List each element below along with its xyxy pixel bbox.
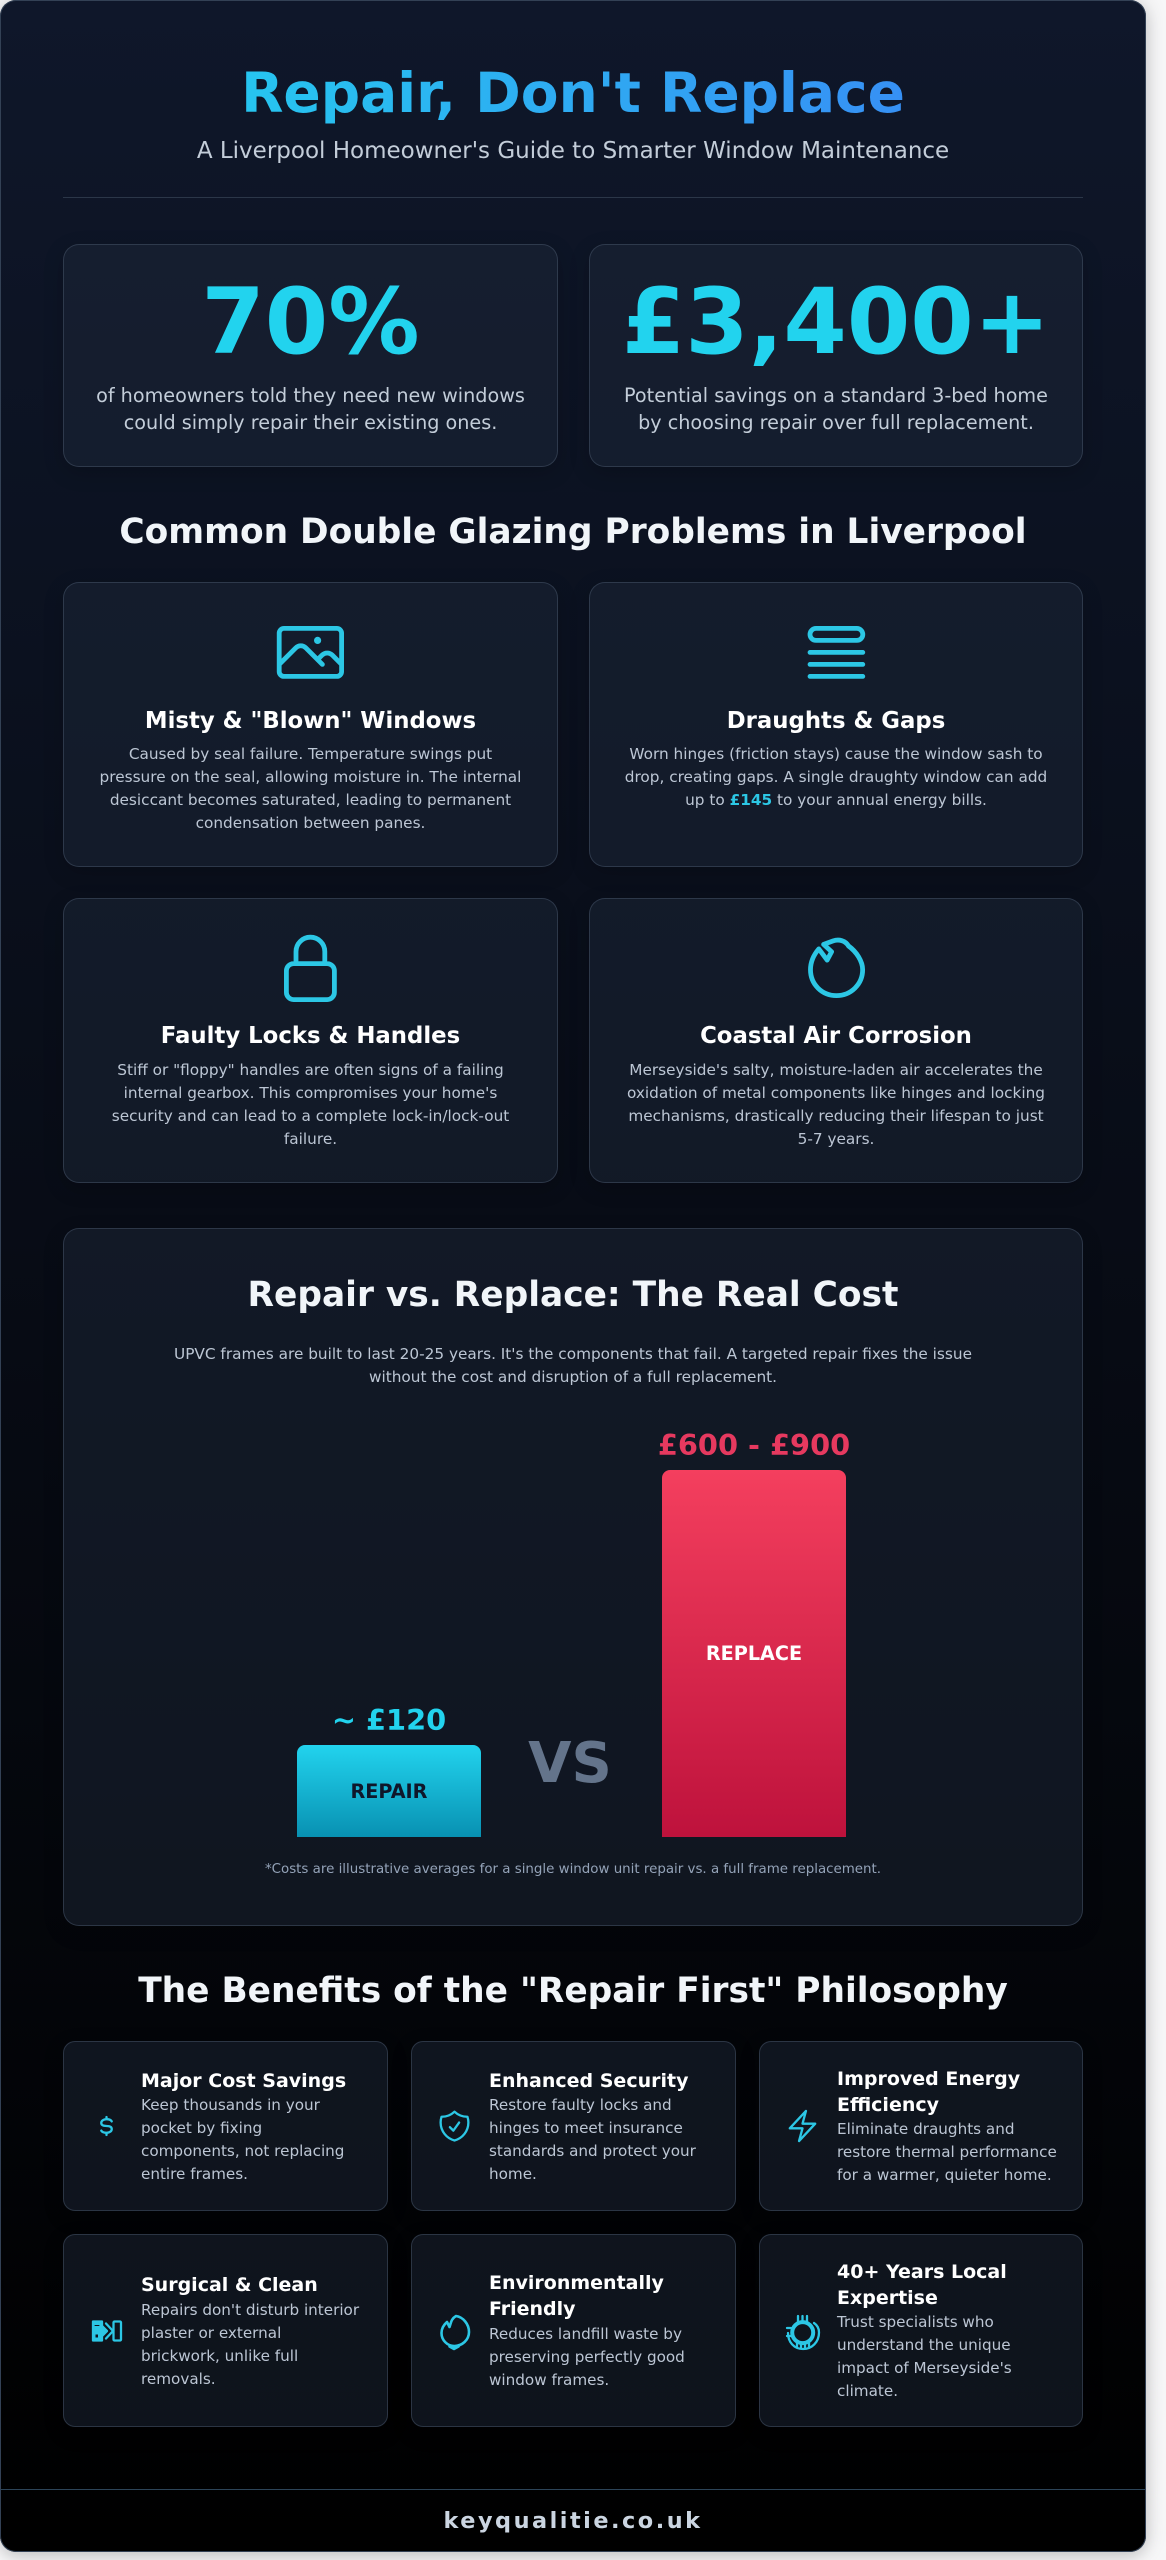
benefit text: Repairs don't disturb interior <box>141 2300 359 2318</box>
card text: desiccant becomes saturated, leading to permanent <box>110 791 511 809</box>
replace bar: REPLACE <box>706 1642 802 1665</box>
benefit title: Surgical & Clean <box>141 2274 318 2296</box>
repair bar: REPAIR <box>351 1780 427 1802</box>
repair value: ~ £120 <box>332 1703 446 1737</box>
card text <box>112 1061 509 1148</box>
icon: queue list <box>808 626 866 679</box>
benefit title: 40+ Years Local <box>837 2261 1007 2283</box>
card heading: Coastal Air Corrosion <box>700 1023 972 1049</box>
benefit text: Keep thousands in your <box>141 2096 320 2114</box>
stat label: Potential savings on a standard 3-bed home <box>624 384 1048 407</box>
benefit text: standards and protect your <box>489 2142 696 2160</box>
card text: up to £145 to your annual energy bills. <box>685 791 987 809</box>
card text: oxidation of metal components like hinges and locking <box>627 1084 1045 1102</box>
card text: Merseyside's salty, moisture-laden air accelerates the <box>629 1061 1043 1079</box>
panel: energy efficiency <box>759 2041 1083 2211</box>
panel: environmentally friendly <box>411 2234 736 2427</box>
card text <box>627 1061 1045 1148</box>
title: Repair, Don't Replace <box>241 61 905 125</box>
card heading: Draughts & Gaps <box>727 708 945 734</box>
stat label: could simply repair their existing ones. <box>124 411 497 434</box>
panel: repair vs replace <box>63 1228 1083 1926</box>
benefit text: climate. <box>837 2382 898 2400</box>
footer website: keyqualitie.co.uk <box>443 2508 703 2534</box>
benefit text: Trust specialists who <box>837 2313 994 2331</box>
stat number: £3,400+: £3,400+ <box>622 268 1050 374</box>
benefit text <box>836 2313 1012 2400</box>
benefit text <box>837 2120 1057 2184</box>
card text <box>100 745 521 832</box>
card text: Stiff or "floppy" handles are often signs of a failing <box>117 1061 504 1079</box>
icon: bolt <box>788 2110 816 2142</box>
benefit text: Eliminate draughts and <box>837 2120 1014 2138</box>
panel: savings stat <box>589 244 1083 467</box>
benefit text: restore thermal performance <box>837 2143 1057 2161</box>
benefit title <box>837 2068 1020 2116</box>
stat label: of homeowners told they need new windows <box>96 384 525 407</box>
bar chart <box>297 1428 850 1837</box>
benefit title: Friendly <box>489 2298 576 2320</box>
card text: Worn hinges (friction stays) cause the window sash to <box>629 745 1043 763</box>
benefit text: for a warmer, quieter home. <box>837 2166 1052 2184</box>
benefit text <box>141 2096 344 2182</box>
icon: picture window <box>276 626 344 679</box>
benefit text: Restore faulty locks and <box>489 2096 672 2114</box>
vs label: VS <box>528 1730 612 1796</box>
benefit text <box>489 2096 696 2182</box>
benefit text: preserving perfectly good <box>489 2348 685 2366</box>
intro text: UPVC frames are built to last 20-25 years. It's the components that fail. A targeted repair fixes the issue <box>174 1345 972 1363</box>
benefit title: Enhanced Security <box>489 2070 688 2092</box>
icon: padlock <box>284 934 337 1002</box>
benefit title: Environmentally <box>489 2272 664 2294</box>
icon: surgical repair <box>92 2320 122 2342</box>
panel: faulty locks <box>63 898 558 1183</box>
benefit title: Improved Energy <box>837 2068 1020 2090</box>
panel: enhanced security <box>411 2041 736 2211</box>
heading: Repair vs. Replace: The Real Cost <box>248 1274 898 1314</box>
benefit text: Reduces landfill waste by <box>489 2324 682 2342</box>
benefit text: brickwork, unlike full <box>141 2346 298 2364</box>
benefit title: Expertise <box>837 2287 938 2309</box>
icon: gear badge <box>786 2314 820 2350</box>
panel: coastal corrosion <box>589 898 1083 1183</box>
card text: pressure on the seal, allowing moisture in. The internal <box>100 768 521 786</box>
card text: Caused by seal failure. Temperature swings put <box>129 745 492 763</box>
replace value: £600 - £900 <box>658 1428 850 1462</box>
panel: misty windows <box>63 582 558 867</box>
card heading: Faulty Locks & Handles <box>161 1023 460 1049</box>
benefit text: hinges to meet insurance <box>489 2118 683 2136</box>
title <box>63 58 1083 128</box>
repair bar <box>297 1745 481 1837</box>
benefit text: home. <box>489 2164 537 2182</box>
stat label <box>96 384 525 434</box>
card text: mechanisms, drastically reducing their lifespan to just <box>628 1107 1044 1125</box>
heading: benefits: The Benefits of the "Repair First" Philosophy <box>138 1970 1008 2010</box>
stat number: 70%: 70% <box>201 268 420 374</box>
card text: 5-7 years. <box>798 1130 874 1148</box>
icon: leaf drop <box>440 2314 470 2350</box>
benefit title <box>837 2261 1007 2309</box>
benefit title <box>489 2272 664 2320</box>
icon: corroded egg shape <box>808 938 866 998</box>
card text: condensation between panes. <box>196 814 425 832</box>
benefit text <box>489 2324 685 2388</box>
intro text <box>174 1345 972 1386</box>
benefit text: window frames. <box>489 2370 609 2388</box>
panel: surgical and clean <box>63 2234 388 2427</box>
card text <box>625 745 1047 809</box>
benefit text <box>141 2300 360 2388</box>
benefit title: Major Cost Savings <box>141 2070 346 2092</box>
card heading: Misty & "Blown" Windows <box>145 708 476 734</box>
subtitle: A Liverpool Homeowner's Guide to Smarter Window Maintenance <box>197 138 949 164</box>
stat label: by choosing repair over full replacement. <box>638 411 1034 434</box>
card text: failure. <box>284 1130 337 1148</box>
icon: dollar <box>100 2116 113 2136</box>
benefit text: impact of Merseyside's <box>837 2359 1012 2377</box>
panel: draughts <box>589 582 1083 867</box>
intro text: without the cost and disruption of a full replacement. <box>369 1368 777 1386</box>
card text: drop, creating gaps. A single draughty window can add <box>625 768 1047 786</box>
panel: local expertise <box>759 2234 1083 2427</box>
benefit text: entire frames. <box>141 2164 248 2182</box>
card text: security and can lead to a complete lock-in/lock-out <box>112 1107 509 1125</box>
panel: 70% stat <box>63 244 558 467</box>
panel: major cost savings <box>63 2041 388 2211</box>
card text: internal gearbox. This compromises your home's <box>124 1084 497 1102</box>
benefit text: plaster or external <box>141 2324 281 2342</box>
stat label <box>624 384 1048 434</box>
footnote: *Costs are illustrative averages for a single window unit repair vs. a full frame replacement. <box>265 1862 881 1877</box>
heading: common problems: Common Double Glazing Problems in Liverpool <box>119 512 1027 552</box>
benefit text: understand the unique <box>837 2336 1011 2354</box>
benefit text: components, not replacing <box>141 2142 344 2160</box>
benefit text: pocket by fixing <box>141 2118 262 2136</box>
icon: shield check <box>440 2110 470 2142</box>
replace bar <box>662 1470 846 1837</box>
benefit text: removals. <box>141 2370 216 2388</box>
benefit title: Efficiency <box>837 2094 939 2116</box>
